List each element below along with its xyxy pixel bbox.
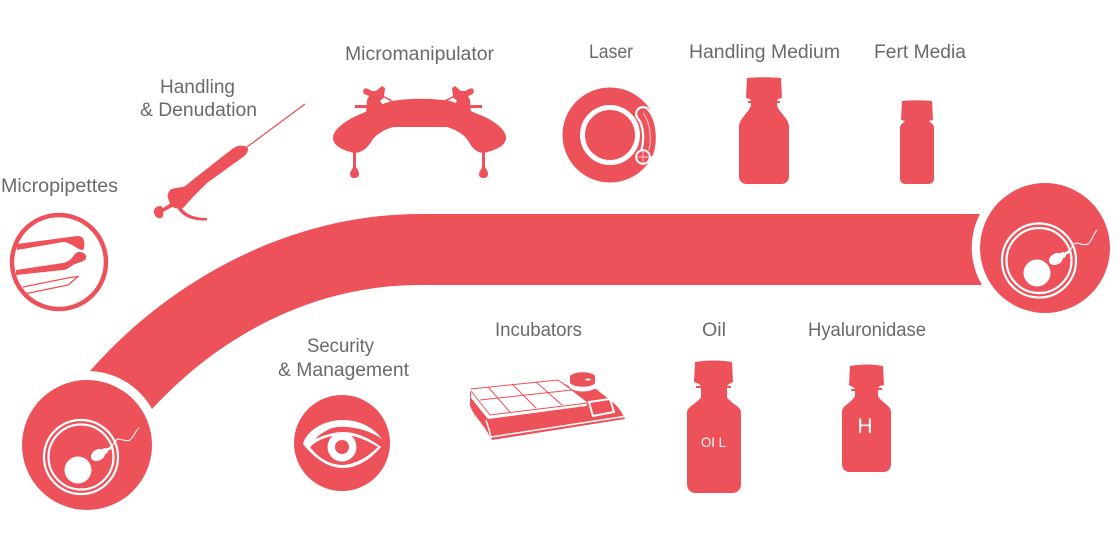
icon: micropipettes bbox=[12, 215, 106, 309]
label: Handling Medium: Handling Medium bbox=[689, 42, 840, 63]
icon: handling medium bottle bbox=[739, 77, 789, 184]
label: Handling and Denudation: & Denudation bbox=[140, 100, 257, 121]
label: Handling and Denudation bbox=[140, 77, 257, 121]
label: Micromanipulator: Micromanipulator bbox=[345, 44, 495, 65]
curved process band bbox=[90, 214, 982, 409]
icon: hyaluronidase bottle bbox=[842, 364, 891, 472]
icon: oil bottle: OI L bbox=[701, 434, 726, 450]
icon: micromanipulator bbox=[333, 86, 506, 178]
label: Security and Management: & Management bbox=[278, 360, 410, 381]
icon: egg and sperm end bbox=[980, 183, 1110, 313]
label: Hyaluronidase: Hyaluronidase bbox=[808, 320, 926, 341]
icon: laser bbox=[562, 88, 658, 182]
label: Oil: Oil bbox=[702, 320, 726, 341]
icon: egg and sperm start bbox=[22, 380, 152, 510]
label: Security and Management: Security bbox=[307, 336, 374, 357]
icon: oil bottle bbox=[687, 360, 741, 493]
icon: incubator bbox=[470, 372, 625, 440]
icon: hyaluronidase bottle: H bbox=[858, 415, 872, 438]
icon: eye bbox=[294, 395, 390, 491]
label: Security and Management bbox=[278, 336, 410, 381]
label: Fert Media: Fert Media bbox=[874, 42, 966, 63]
label: Micropipettes: Micropipettes bbox=[1, 176, 118, 197]
label: Laser: Laser bbox=[589, 42, 634, 63]
icon: syringe bbox=[154, 104, 305, 221]
label: Handling and Denudation: Handling bbox=[160, 77, 235, 98]
label: Incubators: Incubators bbox=[495, 320, 582, 341]
icon: fert media bottle bbox=[900, 100, 934, 184]
